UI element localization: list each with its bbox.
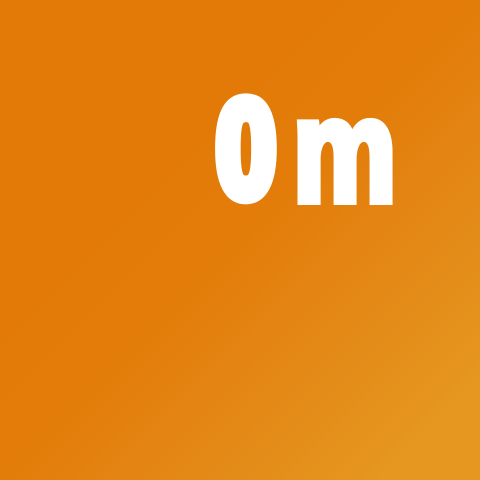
big value: 0m — [216, 69, 396, 231]
digit 0: 0 — [216, 73, 276, 226]
unit m: m — [293, 69, 396, 231]
